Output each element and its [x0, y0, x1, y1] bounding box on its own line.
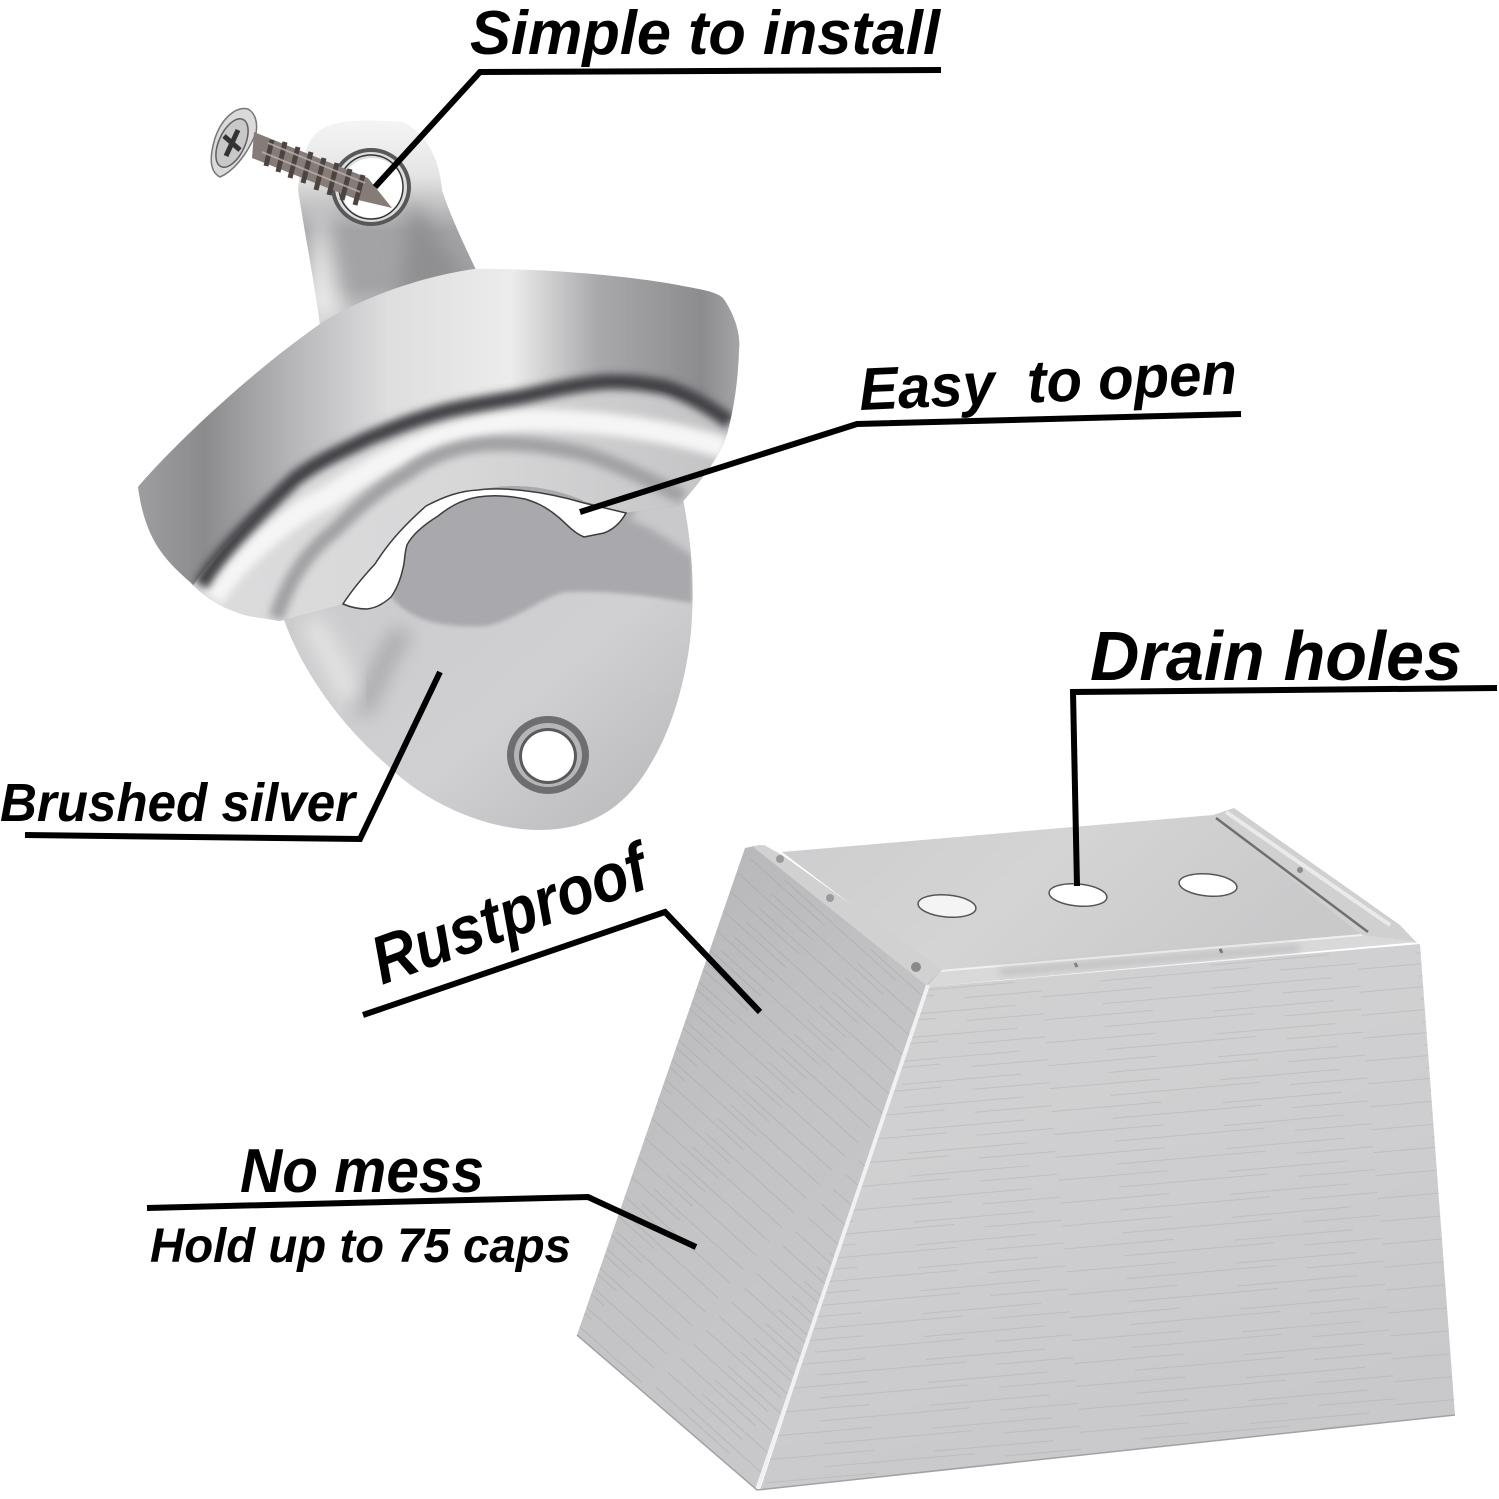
callout: Simple to install: [375, 0, 942, 187]
cap catcher box: [577, 808, 1455, 1490]
callout: No mess, Hold up to 75 caps: No mess: [240, 1137, 484, 1206]
opener: right fold below slit: [630, 502, 690, 556]
callout: No mess, Hold up to 75 caps: Hold up to 75 caps: [150, 1220, 571, 1273]
box: outer bottom edge: [577, 1335, 1455, 1490]
opener: dark fold line: [201, 382, 730, 585]
drain hole middle: [1048, 882, 1108, 908]
box: front face: [760, 944, 1455, 1490]
opener: lip shadow band: [276, 443, 683, 618]
bottle opener product: [130, 109, 745, 840]
callout: Drain holes: [1073, 617, 1497, 886]
opener: tooth shading: [391, 480, 692, 626]
callout: Easy to open: Easy to open: [858, 340, 1238, 423]
opener: cap-catching crescent opening: [343, 489, 626, 609]
callout: Brushed silver: Brushed silver: [0, 773, 358, 833]
opener: tab hole: [331, 148, 411, 226]
opener: lower lip below fold: [190, 382, 745, 630]
opener: plate hole: [507, 716, 589, 794]
drain hole left: [917, 893, 977, 919]
callout: Drain holes: Drain holes: [1090, 617, 1462, 695]
box: left face: [577, 845, 942, 1490]
box: front top seam: [926, 935, 1417, 987]
callout: Rustproof: Rustproof: [361, 827, 663, 999]
box: left seam: [752, 845, 942, 985]
opener: lip highlight: [213, 420, 725, 598]
box: top face: [782, 815, 1362, 972]
opener: curved dome body: [130, 260, 745, 630]
drain hole right: [1178, 872, 1238, 898]
opener: mounting screw: [209, 109, 392, 208]
callout: Brushed silver: [0, 672, 440, 839]
box: top right seam: [1213, 808, 1417, 943]
callout: Easy to open: [580, 340, 1241, 512]
callout: No mess, Hold up to 75 caps: [147, 1137, 696, 1273]
callout: Simple to install: Simple to install: [470, 0, 942, 68]
opener: back plate: [284, 486, 693, 830]
opener: mounting tab: [298, 120, 476, 324]
box: corner edge: [757, 985, 928, 1490]
